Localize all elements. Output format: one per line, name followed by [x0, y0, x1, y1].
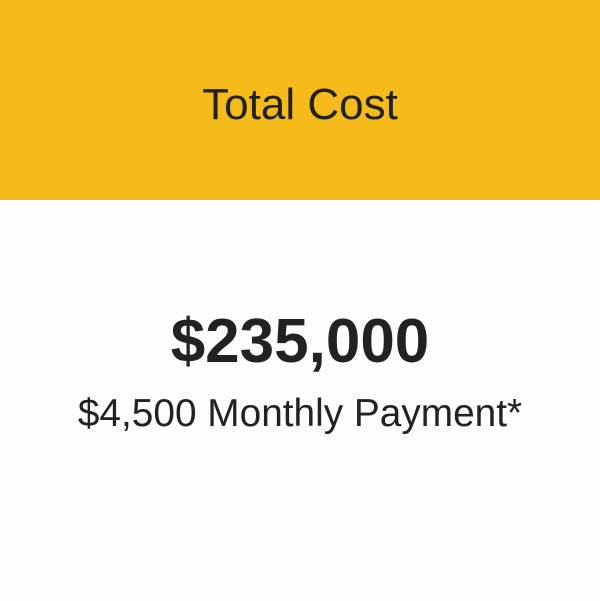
- total amount: $235,000: [171, 307, 429, 376]
- title: Total Cost: [202, 80, 398, 129]
- header band: [0, 0, 600, 200]
- monthly payment: $4,500 Monthly Payment*: [78, 392, 522, 435]
